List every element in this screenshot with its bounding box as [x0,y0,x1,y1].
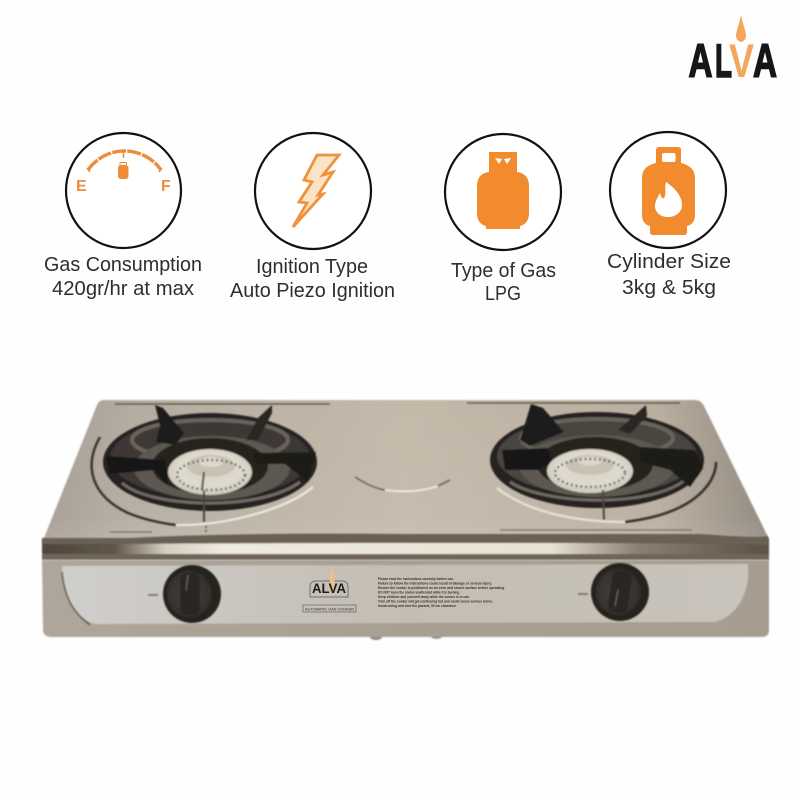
feature: gas consumption [44,133,202,300]
value: auto piezo ignition: Auto Piezo Ignition [230,280,395,302]
front panel [42,560,769,640]
right burner [490,404,716,522]
value: 3kg and 5kg: 3kg & 5kg [622,277,716,299]
ALVA brand logo: A [688,34,712,87]
ALVA brand logo: A [753,34,777,87]
icon: fuel gauge [66,133,181,248]
feature: ignition type [230,133,395,302]
panel safety instructions: Inside airing and vent the passed, 30 cm clearance [378,603,457,608]
icon: lightning bolt [255,133,371,249]
feature: cylinder size [607,132,731,299]
feature: type of gas [445,134,561,305]
ALVA brand logo: L [715,34,732,87]
label: ignition type: Ignition Type [256,256,368,278]
panel safety instructions: Ensure the cooker is positioned on an even and secure surface before operating. [378,585,505,590]
panel safety instructions: DO NOT leave the cooker unattended while it is burning. [378,590,460,594]
stove top surface [43,400,768,545]
label: type of gas: Type of Gas [451,260,556,282]
panel safety instructions: Please read the instructions carefully before use. [378,576,454,581]
label: cylinder size: Cylinder Size [607,251,731,273]
ALVA brand logo [688,15,777,87]
label: gas consumption: Gas Consumption [44,254,202,276]
left control knob [163,565,221,623]
icon: gas cylinder [445,134,561,250]
value: 420gr/hr at max: 420gr/hr at max [52,278,194,300]
panel safety instructions: Keep children and yourself away while the cooker is in use. [378,594,470,599]
icon: fuel gauge: F [161,178,171,195]
ALVA brand logo: V [729,34,755,87]
panel safety instructions: Failure to follow the instructions could result of damage or serious injury. [378,580,492,586]
panel logo badge [303,567,356,612]
icon: fuel gauge: E [76,178,87,195]
panel logo badge: AUTOMATIC GAS COOKER [305,606,354,612]
icon: cylinder with flame [610,132,726,248]
value: LPG: LPG [485,283,521,305]
front edge band [42,534,769,560]
panel logo badge: ALVA [312,580,346,596]
panel safety instructions [378,576,505,608]
panel safety instructions: Turn off the cooker will get continuing hot and could cause serious burns. [378,598,493,604]
product: double burner gas stove [42,400,769,640]
left burner [92,405,317,534]
right control knob [591,563,649,621]
